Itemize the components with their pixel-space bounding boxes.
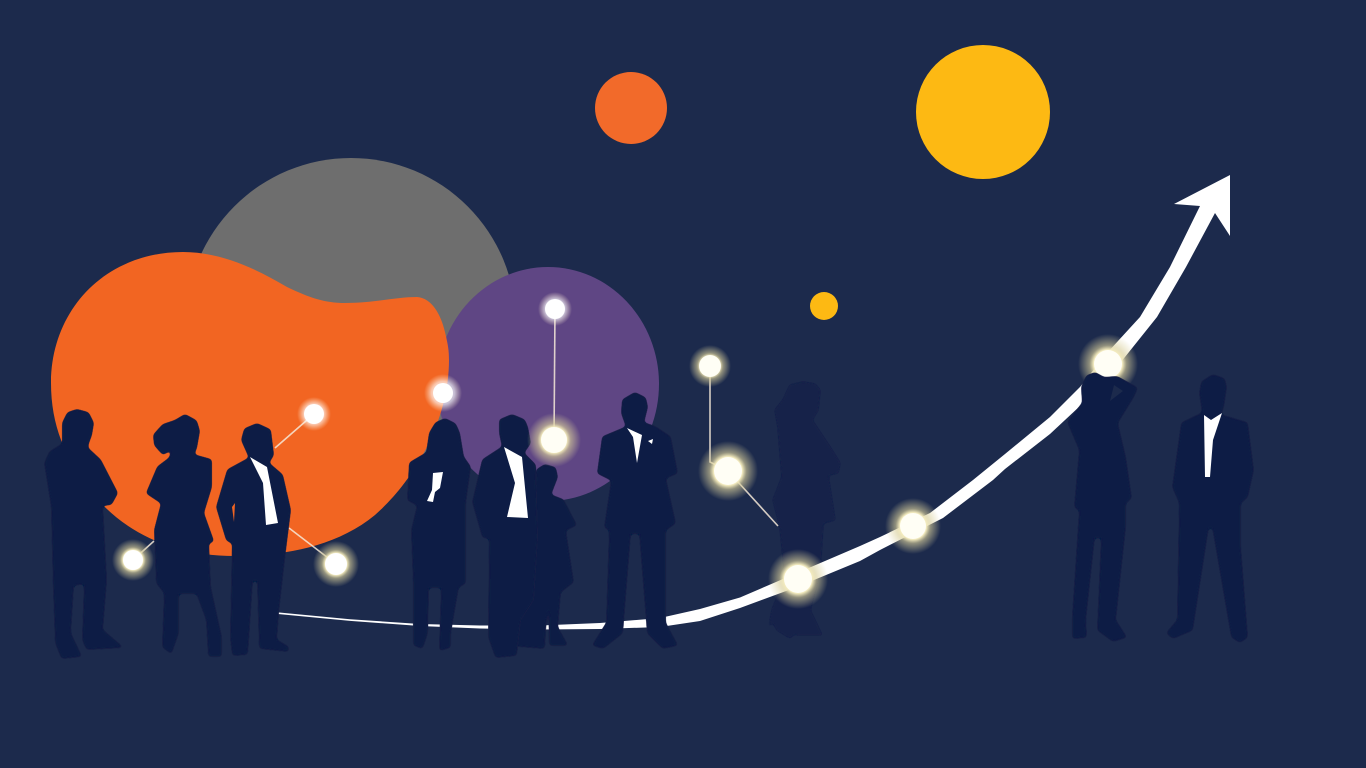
- node: [885, 498, 941, 554]
- node: [527, 413, 581, 467]
- pocket square: [648, 439, 653, 444]
- arm gap: [232, 503, 235, 522]
- glass: [427, 472, 443, 502]
- person 8: [1068, 373, 1137, 641]
- node: [768, 549, 828, 609]
- person 1: [45, 410, 122, 658]
- node: [689, 345, 731, 387]
- growth arrow: [274, 175, 1230, 630]
- node: [313, 541, 359, 587]
- circle: orange small: [595, 72, 667, 144]
- person 9: [1167, 375, 1253, 642]
- person 7: [769, 382, 840, 638]
- circle: yellow large: [916, 45, 1050, 179]
- arm gap: [1110, 385, 1123, 401]
- person 5: [473, 415, 537, 657]
- node: [424, 374, 462, 412]
- shirt: [627, 428, 642, 463]
- person 6: [593, 393, 677, 648]
- shirt: [504, 447, 528, 518]
- circle: purple: [437, 267, 659, 501]
- node: [297, 397, 331, 431]
- blob: orange: [51, 252, 449, 556]
- node: [112, 539, 154, 581]
- node: [538, 292, 572, 326]
- child: [508, 465, 576, 648]
- node: [1078, 334, 1138, 394]
- circle: yellow small: [810, 292, 838, 320]
- connector lines: [133, 309, 778, 564]
- circle: grey: [186, 158, 516, 488]
- node: [698, 441, 758, 501]
- shirt: [1204, 413, 1222, 477]
- person 2: [147, 415, 221, 656]
- person 4: [408, 419, 470, 650]
- glowing nodes: [112, 292, 1138, 609]
- person 3: [217, 424, 290, 655]
- shirt: [250, 457, 278, 525]
